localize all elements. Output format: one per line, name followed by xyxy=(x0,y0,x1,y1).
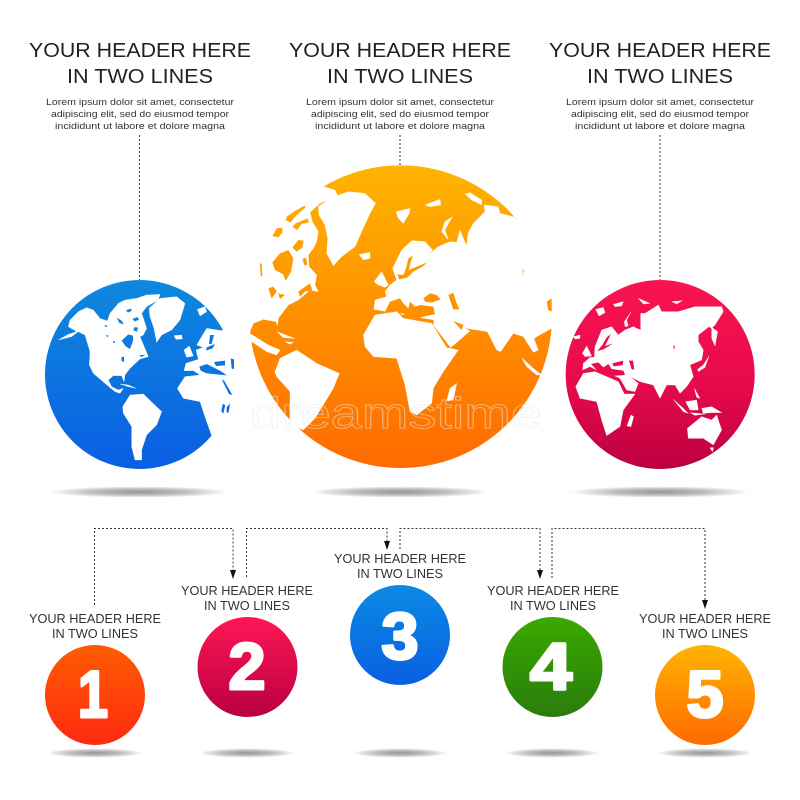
inland seas xyxy=(199,335,234,413)
header block: right xyxy=(549,40,771,132)
step 1: YOUR HEADER HERE xyxy=(29,611,161,626)
globe: red (Eurasia) xyxy=(566,280,755,469)
step 4: YOUR HEADER HERE xyxy=(487,583,619,598)
header block: center: adipiscing elit, sed do eiusmod tempor xyxy=(311,109,490,120)
Arctic islands of Eurasia xyxy=(396,193,482,223)
Novaya Zemlya xyxy=(442,217,453,240)
header block: center xyxy=(289,40,511,132)
Iceland xyxy=(573,335,580,339)
Eurasia xyxy=(374,205,560,352)
Arctic islands xyxy=(596,298,682,316)
Madagascar xyxy=(627,415,634,427)
Africa xyxy=(576,372,635,436)
step 5: 5 xyxy=(686,657,724,731)
South America xyxy=(275,350,339,430)
header block: center: YOUR HEADER HERE xyxy=(289,40,511,62)
UK xyxy=(374,272,388,287)
Europe, Africa and Asia edge xyxy=(177,328,247,440)
connector lines and arrows xyxy=(94,528,708,609)
Madagascar xyxy=(447,383,457,401)
step 3: IN TWO LINES xyxy=(357,566,443,581)
step 4: IN TWO LINES xyxy=(510,598,596,613)
Kamchatka xyxy=(712,327,718,346)
Svalbard xyxy=(197,307,207,316)
step 2 xyxy=(181,583,313,717)
North America xyxy=(240,187,338,332)
step 2: IN TWO LINES xyxy=(204,598,290,613)
Greenland xyxy=(149,297,185,342)
Novaya Zemlya xyxy=(624,312,631,327)
step 3 xyxy=(334,551,466,685)
Iceland xyxy=(174,335,182,339)
South America xyxy=(123,394,162,460)
North America group xyxy=(240,187,376,332)
header block: center: IN TWO LINES xyxy=(327,66,473,88)
step 5 xyxy=(639,611,771,745)
Africa xyxy=(363,312,458,415)
step 1: IN TWO LINES xyxy=(52,626,138,641)
step 2: YOUR HEADER HERE xyxy=(181,583,313,598)
header block: center: Lorem ipsum dolor sit amet, consectetur xyxy=(306,97,495,108)
step 4 xyxy=(487,583,619,717)
globe: orange (Atlantic) xyxy=(240,165,560,468)
header block: left: adipiscing elit, sed do eiusmod tempor xyxy=(51,109,230,120)
header block: right: YOUR HEADER HERE xyxy=(549,40,771,62)
Japan xyxy=(698,356,709,372)
Hudson Bay, channels and lakes xyxy=(260,206,312,299)
header block: left: YOUR HEADER HERE xyxy=(29,40,251,62)
Central American islands xyxy=(120,384,136,388)
Indonesia and Philippines xyxy=(673,388,722,415)
Tasmania xyxy=(710,448,714,452)
step 5: IN TWO LINES xyxy=(662,626,748,641)
inland seas of Eurasia xyxy=(385,256,552,330)
header block: right: IN TWO LINES xyxy=(587,66,733,88)
Central America xyxy=(249,333,280,355)
shadows: steps xyxy=(45,748,755,758)
North America group xyxy=(58,294,160,393)
North America with Arctic islands xyxy=(58,294,160,393)
step 4: 4 xyxy=(530,629,572,703)
header block: left: incididunt ut labore et dolore magna xyxy=(55,121,226,132)
header block: right: incididunt ut labore et dolore magna xyxy=(575,121,746,132)
header block: center: incididunt ut labore et dolore magna xyxy=(315,121,486,132)
Hudson Bay, channels and lakes xyxy=(104,309,145,362)
header block: left xyxy=(29,40,251,132)
UK xyxy=(184,346,193,357)
header block: left: IN TWO LINES xyxy=(67,66,213,88)
Australia xyxy=(687,415,722,445)
header block: right: Lorem ipsum dolor sit amet, consectetur xyxy=(566,97,755,108)
globe: blue (Americas) xyxy=(45,280,247,469)
watermark: dreamstime xyxy=(250,389,542,438)
Greenland xyxy=(318,192,376,266)
Caribbean islands xyxy=(277,332,295,344)
header block: right: adipiscing elit, sed do eiusmod tempor xyxy=(571,109,750,120)
step 2: 2 xyxy=(228,629,266,703)
UK xyxy=(582,346,592,357)
Eurasia xyxy=(583,305,723,398)
step 5: YOUR HEADER HERE xyxy=(639,611,771,626)
inland seas xyxy=(591,334,675,377)
step 3: YOUR HEADER HERE xyxy=(334,551,466,566)
step 1 xyxy=(29,611,161,745)
Sumatra xyxy=(522,358,542,375)
step 1: 1 xyxy=(78,657,108,731)
dotted leader lines to globes xyxy=(140,135,660,280)
Iceland xyxy=(359,252,370,260)
shadow: globes xyxy=(45,486,754,498)
step 3: 3 xyxy=(382,599,418,673)
header block: left: Lorem ipsum dolor sit amet, consectetur xyxy=(46,97,235,108)
